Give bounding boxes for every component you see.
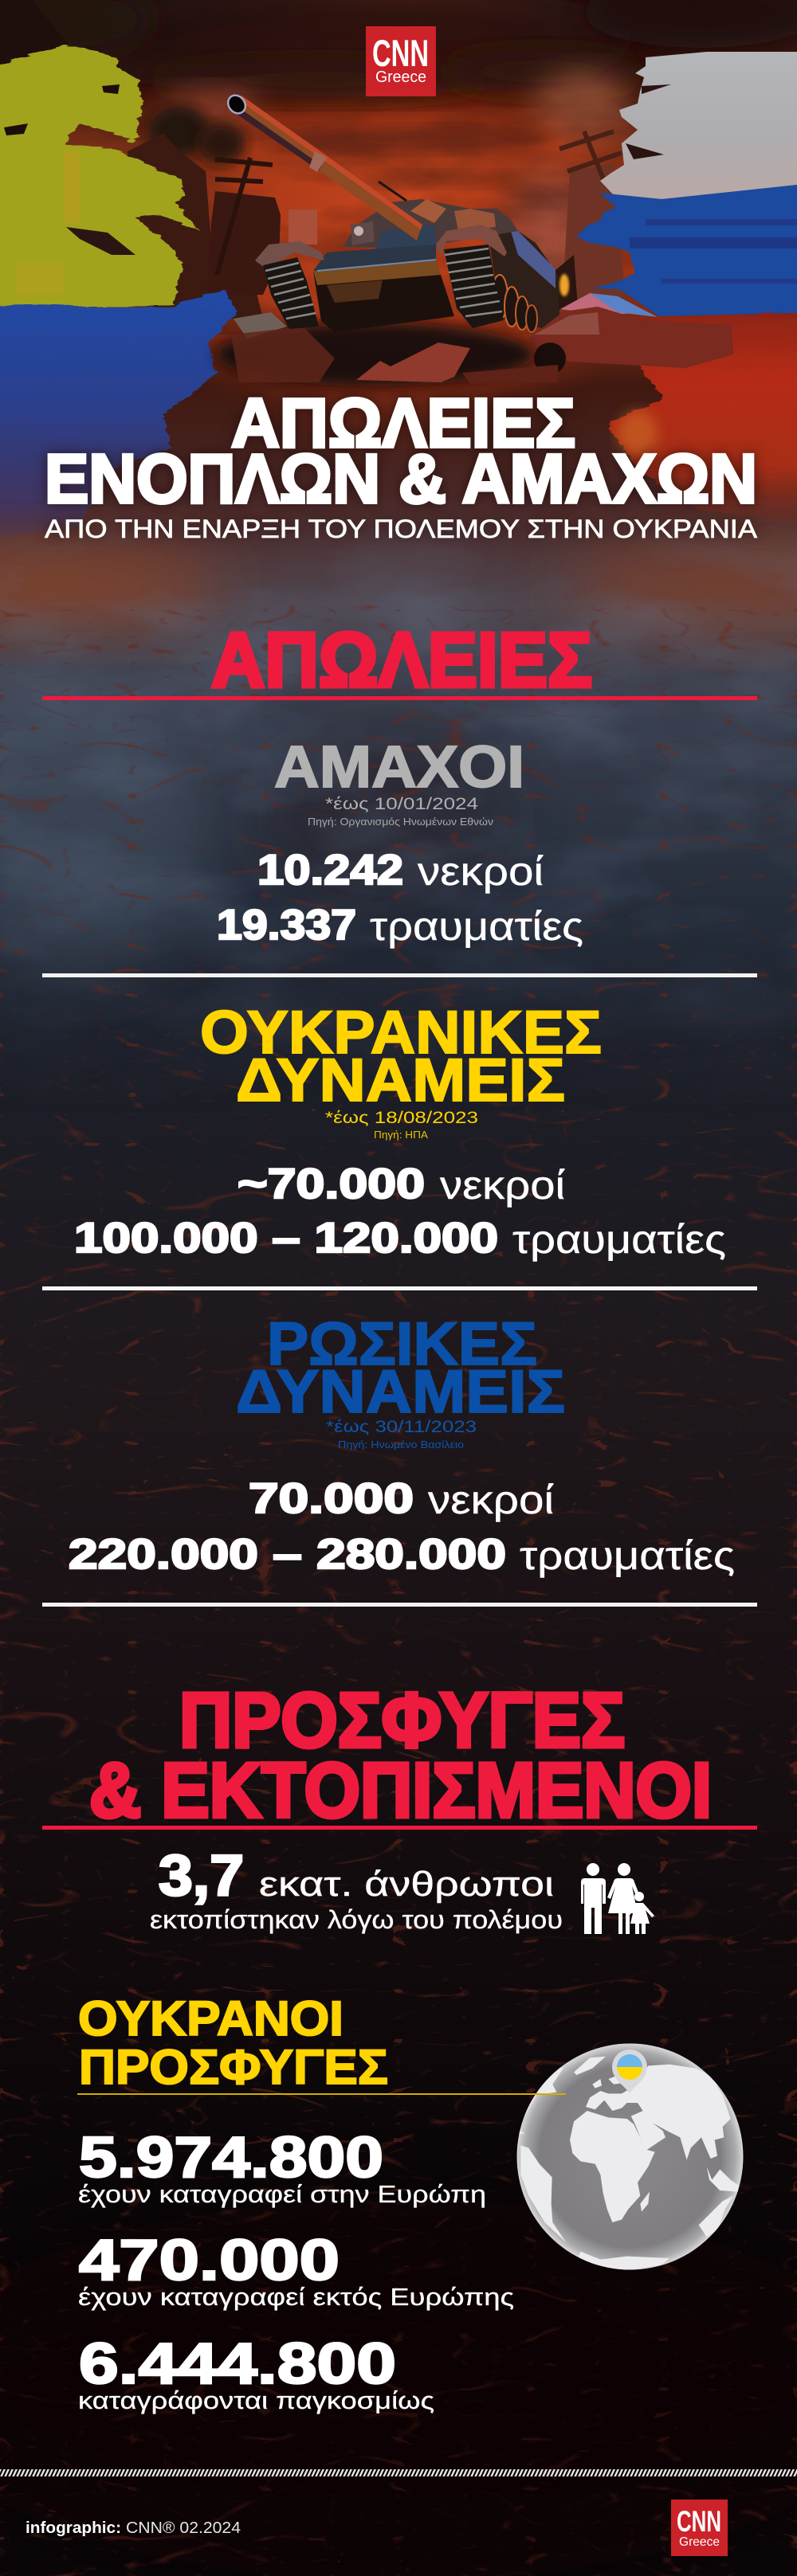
panel: Ukrainian forces: νεκροί bbox=[440, 1163, 565, 1208]
panel: civilians: *έως 10/01/2024 bbox=[325, 795, 478, 813]
section heading: refugees and displaced: ΠΡΟΣΦΥΓΕΣ bbox=[179, 1677, 625, 1764]
turret bbox=[343, 199, 518, 249]
displaced people stat: 3,7 bbox=[159, 1844, 244, 1908]
panel: Ukrainian refugees: ΠΡΟΣΦΥΓΕΣ bbox=[79, 2040, 388, 2094]
footer credit bbox=[26, 2519, 241, 2537]
section heading: refugees and displaced bbox=[42, 1677, 757, 1834]
main title: ΑΠΟ ΤΗΝ ΕΝΑΡΞΗ ΤΟΥ ΠΟΛΕΜΟΥ ΣΤΗΝ ΟΥΚΡΑΝΙΑ bbox=[45, 515, 758, 543]
ruined buildings, smoke and utility poles on the left bbox=[0, 0, 317, 319]
panel: Russian forces: 70.000 bbox=[249, 1475, 414, 1522]
rubble in foreground bbox=[215, 312, 558, 386]
North America bbox=[519, 2068, 563, 2135]
Eurasia bbox=[586, 2065, 731, 2160]
panel: Russian forces: ΡΩΣΙΚΕΣ bbox=[267, 1310, 537, 1378]
panel: Ukrainian refugees: 5.974.800 bbox=[79, 2126, 383, 2190]
main title: ΑΠΩΛΕΙΕΣ bbox=[231, 385, 575, 462]
panel: Ukrainian forces: *έως 18/08/2023 bbox=[325, 1109, 478, 1127]
header illustration: tank in burning city with flags bbox=[0, 0, 797, 542]
panel: civilians: νεκροί bbox=[418, 849, 544, 894]
right fender bbox=[436, 225, 507, 257]
panel: Ukrainian forces: ΔΥΝΑΜΕΙΣ bbox=[236, 1047, 565, 1114]
section heading: losses: ΑΠΩΛΕΙΕΣ bbox=[211, 617, 592, 703]
Scandinavia bbox=[609, 2076, 620, 2085]
Madagascar bbox=[640, 2192, 650, 2212]
left track bbox=[263, 257, 319, 329]
panel: Russian forces: 220.000 – 280.000 bbox=[69, 1531, 506, 1578]
Africa bbox=[570, 2111, 655, 2222]
main gun barrel bbox=[235, 96, 422, 241]
panel: Ukrainian forces: ~70.000 bbox=[238, 1161, 425, 1208]
stripe footer divider bbox=[0, 2469, 797, 2476]
logo: CNN Greece bottom bbox=[671, 2500, 728, 2556]
Australia bbox=[699, 2196, 733, 2237]
panel: civilians: 19.337 bbox=[217, 902, 356, 949]
Greenland bbox=[574, 2057, 606, 2075]
deck bbox=[313, 245, 436, 271]
wrecked car and tent bbox=[528, 293, 733, 374]
panel: Ukrainian forces bbox=[42, 999, 757, 1290]
logo: CNN Greece bottom: CNN bbox=[677, 2505, 721, 2538]
logo: CNN Greece top: CNN bbox=[372, 32, 429, 74]
displaced people stat: εκτοπίστηκαν λόγω του πολέμου bbox=[150, 1905, 563, 1934]
panel: Ukrainian forces: ΟΥΚΡΑΝΙΚΕΣ bbox=[200, 999, 602, 1067]
footer credit: infographic: bbox=[26, 2519, 121, 2537]
Russian flag brush strokes bbox=[576, 52, 797, 526]
panel: civilians: ΑΜΑΧΟΙ bbox=[274, 734, 524, 800]
panel: Ukrainian forces: τραυματίες bbox=[512, 1217, 726, 1262]
right track bbox=[444, 245, 504, 328]
panel: Ukrainian refugees bbox=[77, 1991, 566, 2414]
logo: CNN Greece top bbox=[366, 26, 436, 96]
panel: Ukrainian refugees: 470.000 bbox=[79, 2229, 340, 2292]
Antarctica bbox=[578, 2252, 669, 2270]
main title bbox=[45, 385, 758, 543]
Britain bbox=[592, 2079, 602, 2089]
panel: Ukrainian forces: 100.000 – 120.000 bbox=[74, 1215, 498, 1262]
panel: civilians bbox=[42, 734, 757, 977]
panel: Ukrainian forces: Πηγή: ΗΠΑ bbox=[374, 1129, 428, 1141]
panel: Russian forces: Πηγή: Ηνωμένο Βασίλειο bbox=[338, 1439, 464, 1450]
tank bbox=[225, 92, 559, 332]
panel: Ukrainian refugees: ΟΥΚΡΑΝΟΙ bbox=[78, 1991, 344, 2046]
footer credit: CNN® 02.2024 bbox=[126, 2519, 241, 2537]
panel: Russian forces: ΔΥΝΑΜΕΙΣ bbox=[236, 1358, 565, 1426]
South America bbox=[520, 2145, 566, 2242]
panel: civilians: Πηγή: Οργανισμός Ηνωμένων Εθνών bbox=[308, 816, 493, 828]
logo: CNN Greece bottom: Greece bbox=[679, 2535, 720, 2549]
section heading: refugees and displaced: & ΕΚΤΟΠΙΣΜΕΝΟΙ bbox=[89, 1747, 712, 1834]
storm clouds bbox=[0, 0, 797, 335]
displaced people stat bbox=[150, 1844, 563, 1934]
hull front bbox=[313, 260, 454, 332]
panel: Ukrainian refugees: 6.444.800 bbox=[79, 2332, 396, 2396]
panel: Ukrainian refugees: έχουν καταγραφεί στην Ευρώπη bbox=[78, 2180, 486, 2208]
panel: Ukrainian refugees: καταγράφονται παγκοσμίως bbox=[78, 2386, 434, 2414]
icon: family bbox=[581, 1863, 654, 1934]
panel: Russian forces: νεκροί bbox=[428, 1478, 554, 1522]
panel: Russian forces: *έως 30/11/2023 bbox=[326, 1418, 477, 1436]
panel: Ukrainian refugees: έχουν καταγραφεί εκτός Ευρώπης bbox=[78, 2283, 514, 2311]
panel: civilians: 10.242 bbox=[257, 847, 403, 894]
blue stroke bbox=[0, 288, 238, 542]
panel: Russian forces bbox=[42, 1310, 757, 1607]
map pin bbox=[612, 2049, 647, 2093]
panel: Russian forces: τραυματίες bbox=[520, 1533, 735, 1578]
South East Asia bbox=[707, 2167, 739, 2192]
main title: ΕΝΟΠΛΩΝ & ΑΜΑΧΩΝ bbox=[45, 440, 757, 518]
icon: globe with Ukraine map pin bbox=[516, 2044, 743, 2270]
section heading: losses bbox=[42, 617, 757, 703]
Ukrainian flag brush strokes bbox=[0, 46, 238, 542]
panel: civilians: τραυματίες bbox=[370, 904, 583, 949]
displaced people stat: εκατ. άνθρωποι bbox=[259, 1865, 554, 1904]
ruined building and pole on the right bbox=[542, 131, 626, 312]
hull side and road wheels bbox=[489, 225, 559, 328]
logo: CNN Greece top: Greece bbox=[375, 69, 426, 86]
left fender bbox=[255, 241, 324, 268]
